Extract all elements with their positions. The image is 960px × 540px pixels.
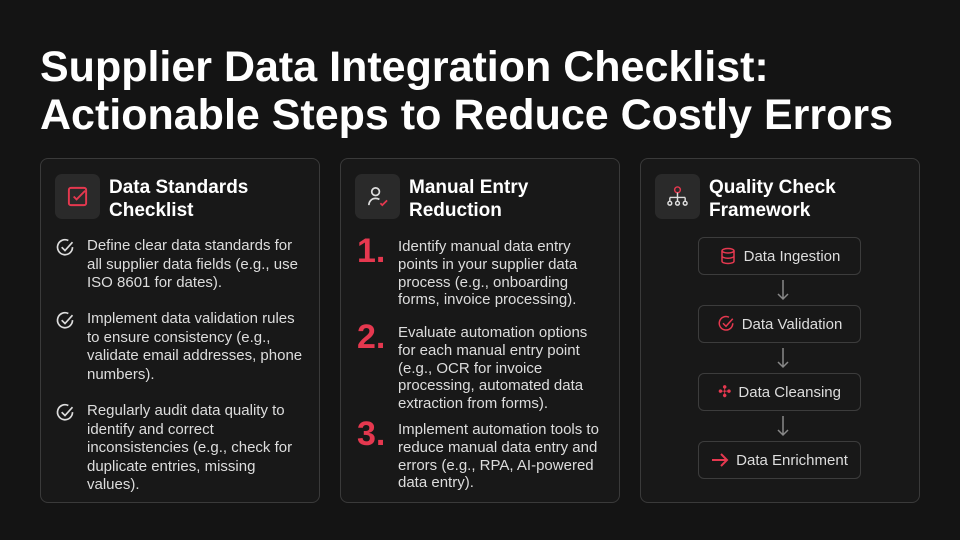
item 1: all supplier data fields (e.g., use	[87, 256, 298, 272]
step 3	[398, 421, 599, 491]
title: Actionable Steps to Reduce Costly Errors	[40, 91, 893, 139]
step 1: forms, invoice processing).	[398, 291, 576, 308]
item 1	[87, 237, 298, 291]
step: cleansing: ✣	[718, 384, 731, 401]
item 2: validate email addresses, phone	[87, 347, 302, 364]
step 2: for each manual entry point	[398, 342, 580, 359]
heading	[109, 177, 248, 221]
heading: Quality Check	[709, 177, 836, 198]
step: cleansing: Data Cleansing	[738, 384, 841, 400]
icon: checkbox	[55, 174, 100, 219]
item 3	[87, 402, 292, 493]
title	[40, 43, 893, 139]
arrow	[778, 348, 788, 368]
item 3: values).	[87, 476, 140, 493]
check icon 1	[56, 238, 74, 256]
arrow	[778, 280, 788, 300]
arrow	[778, 416, 788, 436]
step: enrichment	[698, 441, 861, 479]
check icon 2	[56, 312, 74, 329]
panel: data standards	[40, 158, 320, 503]
item 3: duplicate entries, missing	[87, 458, 255, 474]
number 3: 3.	[357, 415, 385, 453]
heading	[709, 177, 836, 221]
item 2: Implement data validation rules	[87, 310, 295, 327]
item 3: inconsistencies (e.g., check for	[87, 439, 292, 456]
step: validation: Data Validation	[742, 316, 842, 332]
step 2: extraction from forms).	[398, 395, 548, 412]
icon: user check	[355, 174, 400, 219]
step 3: reduce manual data entry and	[398, 439, 597, 456]
step 3: data entry).	[398, 474, 474, 491]
item 2: numbers).	[87, 366, 155, 382]
item 1: ISO 8601 for dates).	[87, 274, 222, 291]
step 2	[398, 324, 587, 412]
heading: Reduction	[409, 200, 502, 221]
heading: Manual Entry	[409, 177, 528, 198]
step 3: Implement automation tools to	[398, 421, 599, 438]
icon: hierarchy	[655, 174, 700, 219]
step 1: points in your supplier data	[398, 256, 577, 273]
step 1	[398, 238, 578, 308]
check icon 3	[56, 404, 74, 421]
item 3: identify and correct	[87, 420, 214, 438]
step: ingestion: Data Ingestion	[744, 248, 840, 264]
step: enrichment: Data Enrichment	[736, 452, 848, 468]
step 2: (e.g., OCR for invoice	[398, 360, 542, 377]
step 2: Evaluate automation options	[398, 324, 587, 341]
title: Supplier Data Integration Checklist:	[40, 43, 769, 91]
item 1: Define clear data standards for	[87, 237, 292, 254]
panel: manual entry	[340, 158, 620, 503]
item 2: to ensure consistency (e.g.,	[87, 328, 270, 346]
step 1: process (e.g., onboarding	[398, 274, 568, 291]
heading: Checklist	[109, 200, 193, 221]
number 1: 1.	[357, 232, 385, 270]
item 2	[87, 310, 302, 382]
panel: quality check	[640, 158, 920, 503]
item 3: Regularly audit data quality to	[87, 402, 285, 419]
step: validation	[698, 305, 861, 343]
heading: Data Standards	[109, 177, 248, 198]
step 1: Identify manual data entry	[398, 238, 571, 255]
step: cleansing	[698, 373, 861, 411]
heading	[409, 177, 528, 221]
heading: Framework	[709, 200, 810, 221]
step 3: errors (e.g., RPA, AI-powered	[398, 457, 594, 474]
step 2: processing, automated data	[398, 377, 583, 394]
number 2: 2.	[357, 318, 385, 356]
step: ingestion	[698, 237, 861, 275]
